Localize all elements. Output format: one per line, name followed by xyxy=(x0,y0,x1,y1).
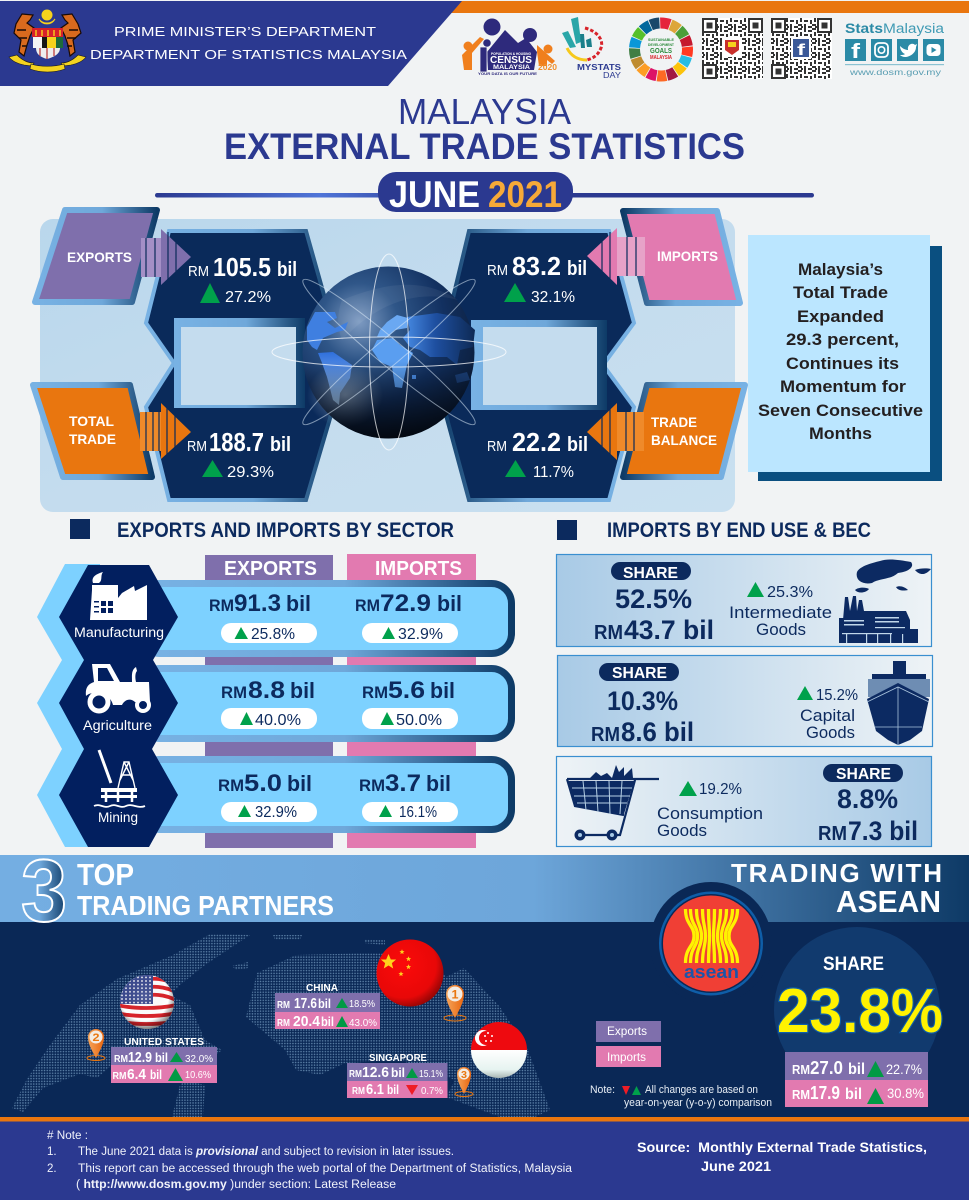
logo: census 2020: CENSUS xyxy=(490,55,532,66)
heading: imports by end use: IMPORTS BY END USE & BEC xyxy=(607,519,871,542)
StatsMalaysia social block xyxy=(845,21,945,77)
callout: headline message: Malaysia’s xyxy=(798,261,883,279)
callout: headline message: Seven Consecutive xyxy=(758,402,923,420)
row: manufacturing: RM xyxy=(355,596,380,615)
pin: rank 2 xyxy=(87,1029,105,1060)
partner: china: bil xyxy=(321,1014,334,1029)
partner: china: RM xyxy=(277,1000,290,1011)
row: agriculture: bil xyxy=(290,678,315,703)
row: agriculture: 5.6 xyxy=(388,677,425,704)
stat: imports value xyxy=(487,251,587,306)
SDG wheel label xyxy=(648,37,674,61)
footer notes: 1. xyxy=(47,1146,57,1158)
footer notes: ( http://www.dosm.gov.my )under section: Latest Release xyxy=(76,1179,396,1191)
panel: consumption goods: 8.8% xyxy=(837,784,898,814)
column: exports xyxy=(205,555,333,848)
row: mining: 3.7 xyxy=(385,770,421,797)
partner: united states: 6.4 xyxy=(127,1066,147,1083)
icon: industrial plant xyxy=(839,559,931,643)
logo: census 2020: YOUR DATA IS OUR FUTURE xyxy=(478,72,538,76)
partner: singapore: 6.1 xyxy=(366,1081,384,1098)
panel: capital goods: 10.3% xyxy=(607,686,678,716)
partner: united states: 10.6% xyxy=(185,1070,211,1081)
navy frame: left xyxy=(146,231,340,500)
panel: capital goods: SHARE xyxy=(612,665,667,682)
date banner: June 2021: 2021 xyxy=(488,174,562,215)
partner: united states: RM xyxy=(114,1054,128,1065)
pin: rank 3 xyxy=(455,1067,473,1096)
title: MALAYSIA xyxy=(398,91,571,132)
stat: exports value: 27.2% xyxy=(225,289,271,306)
footer source: June 2021 xyxy=(701,1158,771,1174)
row: agriculture: bil xyxy=(430,678,455,703)
footer source: Source: Monthly External Trade Statistics, xyxy=(637,1139,927,1155)
partner: singapore: RM xyxy=(352,1086,365,1097)
label: agriculture: Agriculture xyxy=(83,718,152,733)
row: manufacturing: bil xyxy=(437,591,462,616)
panel: consumption goods: Consumption xyxy=(657,804,763,823)
stat: trade balance value: RM xyxy=(487,438,507,455)
row: agriculture: 50.0% xyxy=(396,712,442,729)
SDG wheel label: MALAYSIA xyxy=(650,55,672,61)
logo: SDG wheel xyxy=(634,23,688,76)
partner: china: 17.6 xyxy=(294,995,317,1012)
panel: intermediate goods: 25.3% xyxy=(767,584,813,601)
logo: census 2020 xyxy=(462,18,557,76)
row: manufacturing: 32.9% xyxy=(398,626,443,643)
note: y-o-y: year-on-year (y-o-y) comparison xyxy=(624,1097,772,1109)
note: y-o-y: All changes are based on xyxy=(645,1084,758,1096)
stat: total trade value: 29.3% xyxy=(227,464,274,481)
panel: capital goods: Goods xyxy=(806,723,855,742)
row: agriculture: 40.0% xyxy=(255,712,301,729)
icon: facebook: f xyxy=(851,41,860,63)
icon: factory xyxy=(90,572,147,620)
partner: china: 20.4 xyxy=(293,1013,321,1030)
stat: imports value: bil xyxy=(567,258,587,280)
row: agriculture: 8.8 xyxy=(248,677,285,704)
row: mining: RM xyxy=(218,776,244,795)
row: mining: bil xyxy=(426,771,451,796)
panel: intermediate goods: 52.5% xyxy=(615,584,692,614)
partner: united states: bil xyxy=(150,1067,162,1082)
logo: census 2020: 2020 xyxy=(538,62,557,72)
panel: intermediate goods: Intermediate xyxy=(729,603,832,622)
SDG wheel label: SUSTAINABLE xyxy=(648,37,674,42)
dotted world map xyxy=(12,934,550,1117)
panel: trade overview xyxy=(33,210,745,512)
table: ASEAN trade: RM xyxy=(792,1062,810,1077)
footer notes: This report can be accessed through the web portal of the Department of Statistics, Malaysia xyxy=(78,1163,573,1175)
icon: shopping cart xyxy=(567,765,659,840)
stat: total trade value: 188.7 xyxy=(209,427,264,457)
icon: coat of arms xyxy=(9,10,86,72)
row: manufacturing xyxy=(140,584,512,654)
callout: headline message xyxy=(748,235,942,481)
tag: total trade: TRADE xyxy=(69,431,116,447)
stat: imports value: 83.2 xyxy=(512,251,561,281)
header text: ministry: DEPARTMENT OF STATISTICS MALAYSIA xyxy=(90,48,408,62)
icon: youtube xyxy=(923,39,944,61)
column: imports: IMPORTS xyxy=(375,558,462,580)
stat: exports value: 105.5 xyxy=(213,252,271,282)
panel: consumption goods: SHARE xyxy=(836,766,891,783)
panel: capital goods: 15.2% xyxy=(816,687,858,704)
stat: exports value: bil xyxy=(277,259,297,281)
StatsMalaysia social block: Stats xyxy=(845,21,883,36)
heading: top 3 trading partners: TOP xyxy=(77,857,134,892)
table: ASEAN trade: bil xyxy=(845,1086,862,1103)
callout: headline message: Momentum for xyxy=(780,378,907,396)
stat: trade balance value xyxy=(487,427,588,481)
icon: cargo ship xyxy=(867,661,930,745)
logo: ASEAN: asean xyxy=(684,962,739,982)
row: mining: bil xyxy=(287,771,312,796)
table: ASEAN trade: 30.8% xyxy=(887,1086,924,1101)
partner: singapore: SINGAPORE xyxy=(369,1052,427,1064)
logo: mystats day: DAY xyxy=(603,70,621,80)
StatsMalaysia social block: www.dosm.gov.my xyxy=(849,67,942,77)
tag: imports xyxy=(623,211,740,303)
icon: twitter xyxy=(897,39,918,61)
legend: exports and imports xyxy=(596,1021,661,1067)
header band xyxy=(0,1,969,86)
panel: capital goods: Capital xyxy=(800,706,855,725)
row: agriculture xyxy=(140,668,512,738)
partner: united states: UNITED STATES xyxy=(124,1036,204,1048)
footer notes xyxy=(47,1130,573,1191)
date banner: June 2021 xyxy=(155,172,814,215)
legend: exports and imports: Exports xyxy=(607,1026,647,1038)
note: y-o-y: Note: xyxy=(590,1084,615,1096)
partner: united states: RM xyxy=(112,1071,126,1082)
panel: consumption goods: RM xyxy=(818,823,847,845)
tag: trade balance: TRADE xyxy=(651,414,697,430)
partner: singapore xyxy=(347,1052,448,1098)
logo: census 2020: MALAYSIA xyxy=(493,64,530,71)
table: ASEAN trade: 17.9 xyxy=(810,1083,840,1103)
stat: exports value xyxy=(188,252,297,306)
row: agriculture: RM xyxy=(221,683,247,702)
heading: trading with ASEAN: TRADING WITH xyxy=(731,858,942,888)
partner: china xyxy=(275,982,380,1030)
callout: headline message: 29.3 percent, xyxy=(786,331,899,349)
panel: consumption goods: 19.2% xyxy=(699,781,742,798)
table: ASEAN trade xyxy=(785,1052,928,1107)
partner: singapore: bil xyxy=(387,1082,399,1097)
stat: imports value: RM xyxy=(487,262,508,279)
panel: intermediate goods: RM xyxy=(594,622,623,644)
heading: top 3 trading partners xyxy=(21,841,334,940)
tag: total trade: TOTAL xyxy=(69,413,114,429)
panel: intermediate goods: 43.7 bil xyxy=(624,615,714,645)
panel: intermediate goods: Goods xyxy=(756,620,806,639)
stat: total trade value: bil xyxy=(270,434,291,456)
partner: singapore: bil xyxy=(391,1065,405,1080)
window: left xyxy=(174,318,305,408)
panel: consumption goods: 7.3 bil xyxy=(848,816,918,846)
table: ASEAN trade: 22.7% xyxy=(886,1062,922,1077)
panel: intermediate goods: SHARE xyxy=(623,565,678,582)
row: manufacturing: 72.9 xyxy=(380,590,431,617)
QR code 2: f xyxy=(797,42,806,59)
panel: consumption goods: Goods xyxy=(657,821,707,840)
partner: china: bil xyxy=(318,996,331,1011)
stat: total trade value xyxy=(187,427,291,481)
callout: headline message: Months xyxy=(809,425,872,443)
row: mining xyxy=(140,760,512,830)
navy frame: right xyxy=(440,231,634,500)
note: y-o-y xyxy=(590,1084,772,1109)
stat: imports value: 32.1% xyxy=(531,289,575,306)
pin: rank 1 xyxy=(444,985,466,1021)
StatsMalaysia social block: Malaysia xyxy=(883,21,945,36)
stat: trade balance value: 22.2 xyxy=(512,427,561,457)
callout: headline message: Total Trade xyxy=(793,284,888,302)
row: mining: RM xyxy=(359,776,385,795)
partner: united states: bil xyxy=(155,1050,168,1065)
section background: navy xyxy=(0,922,969,1117)
footer notes: # Note : xyxy=(47,1130,88,1142)
pin: rank 2: 2 xyxy=(92,1032,100,1044)
stat: ASEAN share xyxy=(774,927,943,1093)
tag: trade balance xyxy=(623,385,745,477)
hexagon backing xyxy=(37,564,100,847)
hexagon column xyxy=(59,565,178,847)
heading: exports and imports by sector: EXPORTS AND IMPORTS BY SECTOR xyxy=(117,519,454,542)
label: mining: Mining xyxy=(98,810,138,825)
flag: china xyxy=(376,940,444,1006)
label: manufacturing: Manufacturing xyxy=(74,625,164,640)
logo: census 2020: POPULATION & HOUSING xyxy=(491,52,531,56)
arrow: exports xyxy=(141,229,191,285)
partner: china: 18.5% xyxy=(349,999,375,1010)
icon: instagram xyxy=(871,39,892,61)
partner: china: CHINA xyxy=(306,982,338,994)
column: exports: EXPORTS xyxy=(224,558,317,580)
partner: china: 43.0% xyxy=(349,1018,377,1029)
footer source xyxy=(637,1139,927,1174)
icon: oil rig xyxy=(94,750,145,807)
arrow: trade balance xyxy=(587,403,644,460)
partner: singapore: 0.7% xyxy=(421,1086,443,1097)
partner: china: RM xyxy=(277,1018,290,1029)
footer notes: 2. xyxy=(47,1163,57,1175)
partner: united states: 32.0% xyxy=(185,1054,213,1065)
title xyxy=(224,91,745,167)
partner: singapore: 15.1% xyxy=(419,1069,443,1080)
heading: trading with ASEAN xyxy=(731,858,942,919)
icon: tractor xyxy=(86,664,150,711)
stat: total trade value: RM xyxy=(187,438,207,455)
date banner: June 2021: JUNE xyxy=(389,174,480,215)
title: EXTERNAL TRADE STATISTICS xyxy=(224,125,745,167)
callout: headline message: Expanded xyxy=(797,308,884,326)
panel: capital goods: 8.6 bil xyxy=(621,717,694,747)
logo: ASEAN xyxy=(650,882,772,1004)
flag: singapore xyxy=(471,1022,527,1078)
heading: top 3 trading partners: TRADING PARTNERS xyxy=(77,890,334,921)
section banner xyxy=(0,855,969,922)
header text: ministry xyxy=(90,25,408,62)
row: manufacturing: 91.3 xyxy=(234,590,281,617)
row: agriculture: RM xyxy=(362,683,388,702)
QR code 1 xyxy=(702,18,763,79)
row: manufacturing: RM xyxy=(209,596,234,615)
partner: singapore: 12.6 xyxy=(362,1064,389,1081)
heading: trading with ASEAN: ASEAN xyxy=(836,884,941,919)
legend: exports and imports: Imports xyxy=(607,1052,646,1064)
tag: exports xyxy=(35,210,157,302)
logo: mystats day: MYSTATS xyxy=(577,62,621,72)
table: ASEAN trade: bil xyxy=(848,1061,865,1078)
logo: mystats day xyxy=(562,17,621,80)
tag: trade balance: BALANCE xyxy=(651,432,717,448)
stat: trade balance value: 11.7% xyxy=(533,464,574,481)
partner: united states xyxy=(111,1036,217,1083)
globe xyxy=(272,254,506,450)
flag: united states xyxy=(118,975,176,1029)
SDG wheel label: GOALS xyxy=(650,48,672,55)
table: ASEAN trade: 27.0 xyxy=(810,1058,843,1078)
stat: exports value: RM xyxy=(188,263,209,280)
window: right xyxy=(471,320,607,410)
row: manufacturing: 25.8% xyxy=(251,626,295,643)
QR code 2 xyxy=(771,18,832,79)
panel: consumption goods xyxy=(556,756,932,846)
pin: rank 1: 1 xyxy=(452,988,459,1002)
stat: ASEAN share: 23.8% xyxy=(777,977,943,1046)
stat: ASEAN share: SHARE xyxy=(823,954,884,975)
heading: top 3 trading partners: 3 xyxy=(21,841,67,940)
column: imports xyxy=(347,554,476,848)
footer notes: The June 2021 data is provisional and subject to revision in later issues. xyxy=(78,1146,454,1158)
row: mining: 5.0 xyxy=(244,770,282,797)
partner: singapore: RM xyxy=(349,1069,362,1080)
row: manufacturing: bil xyxy=(286,591,311,616)
tag: total trade xyxy=(33,385,152,477)
SDG wheel label: DEVELOPMENT xyxy=(648,42,674,47)
header text: ministry: PRIME MINISTER’S DEPARTMENT xyxy=(114,25,376,39)
arrow: imports xyxy=(587,228,645,285)
panel: intermediate goods xyxy=(556,554,932,646)
partner: united states: 12.9 xyxy=(128,1049,152,1066)
table: ASEAN trade: RM xyxy=(792,1087,810,1102)
panel: capital goods xyxy=(558,656,932,747)
callout: headline message: Continues its xyxy=(786,355,899,373)
row: mining: 16.1% xyxy=(399,804,437,821)
footer band xyxy=(0,1117,969,1200)
tag: exports: EXPORTS xyxy=(67,249,132,265)
row: mining: 32.9% xyxy=(255,804,297,821)
stat: trade balance value: bil xyxy=(567,434,588,456)
arrow: total trade xyxy=(140,403,191,459)
pin: rank 3: 3 xyxy=(461,1070,467,1081)
panel: sector table xyxy=(37,554,512,848)
tag: imports: IMPORTS xyxy=(657,248,718,264)
panel: capital goods: RM xyxy=(591,724,620,746)
